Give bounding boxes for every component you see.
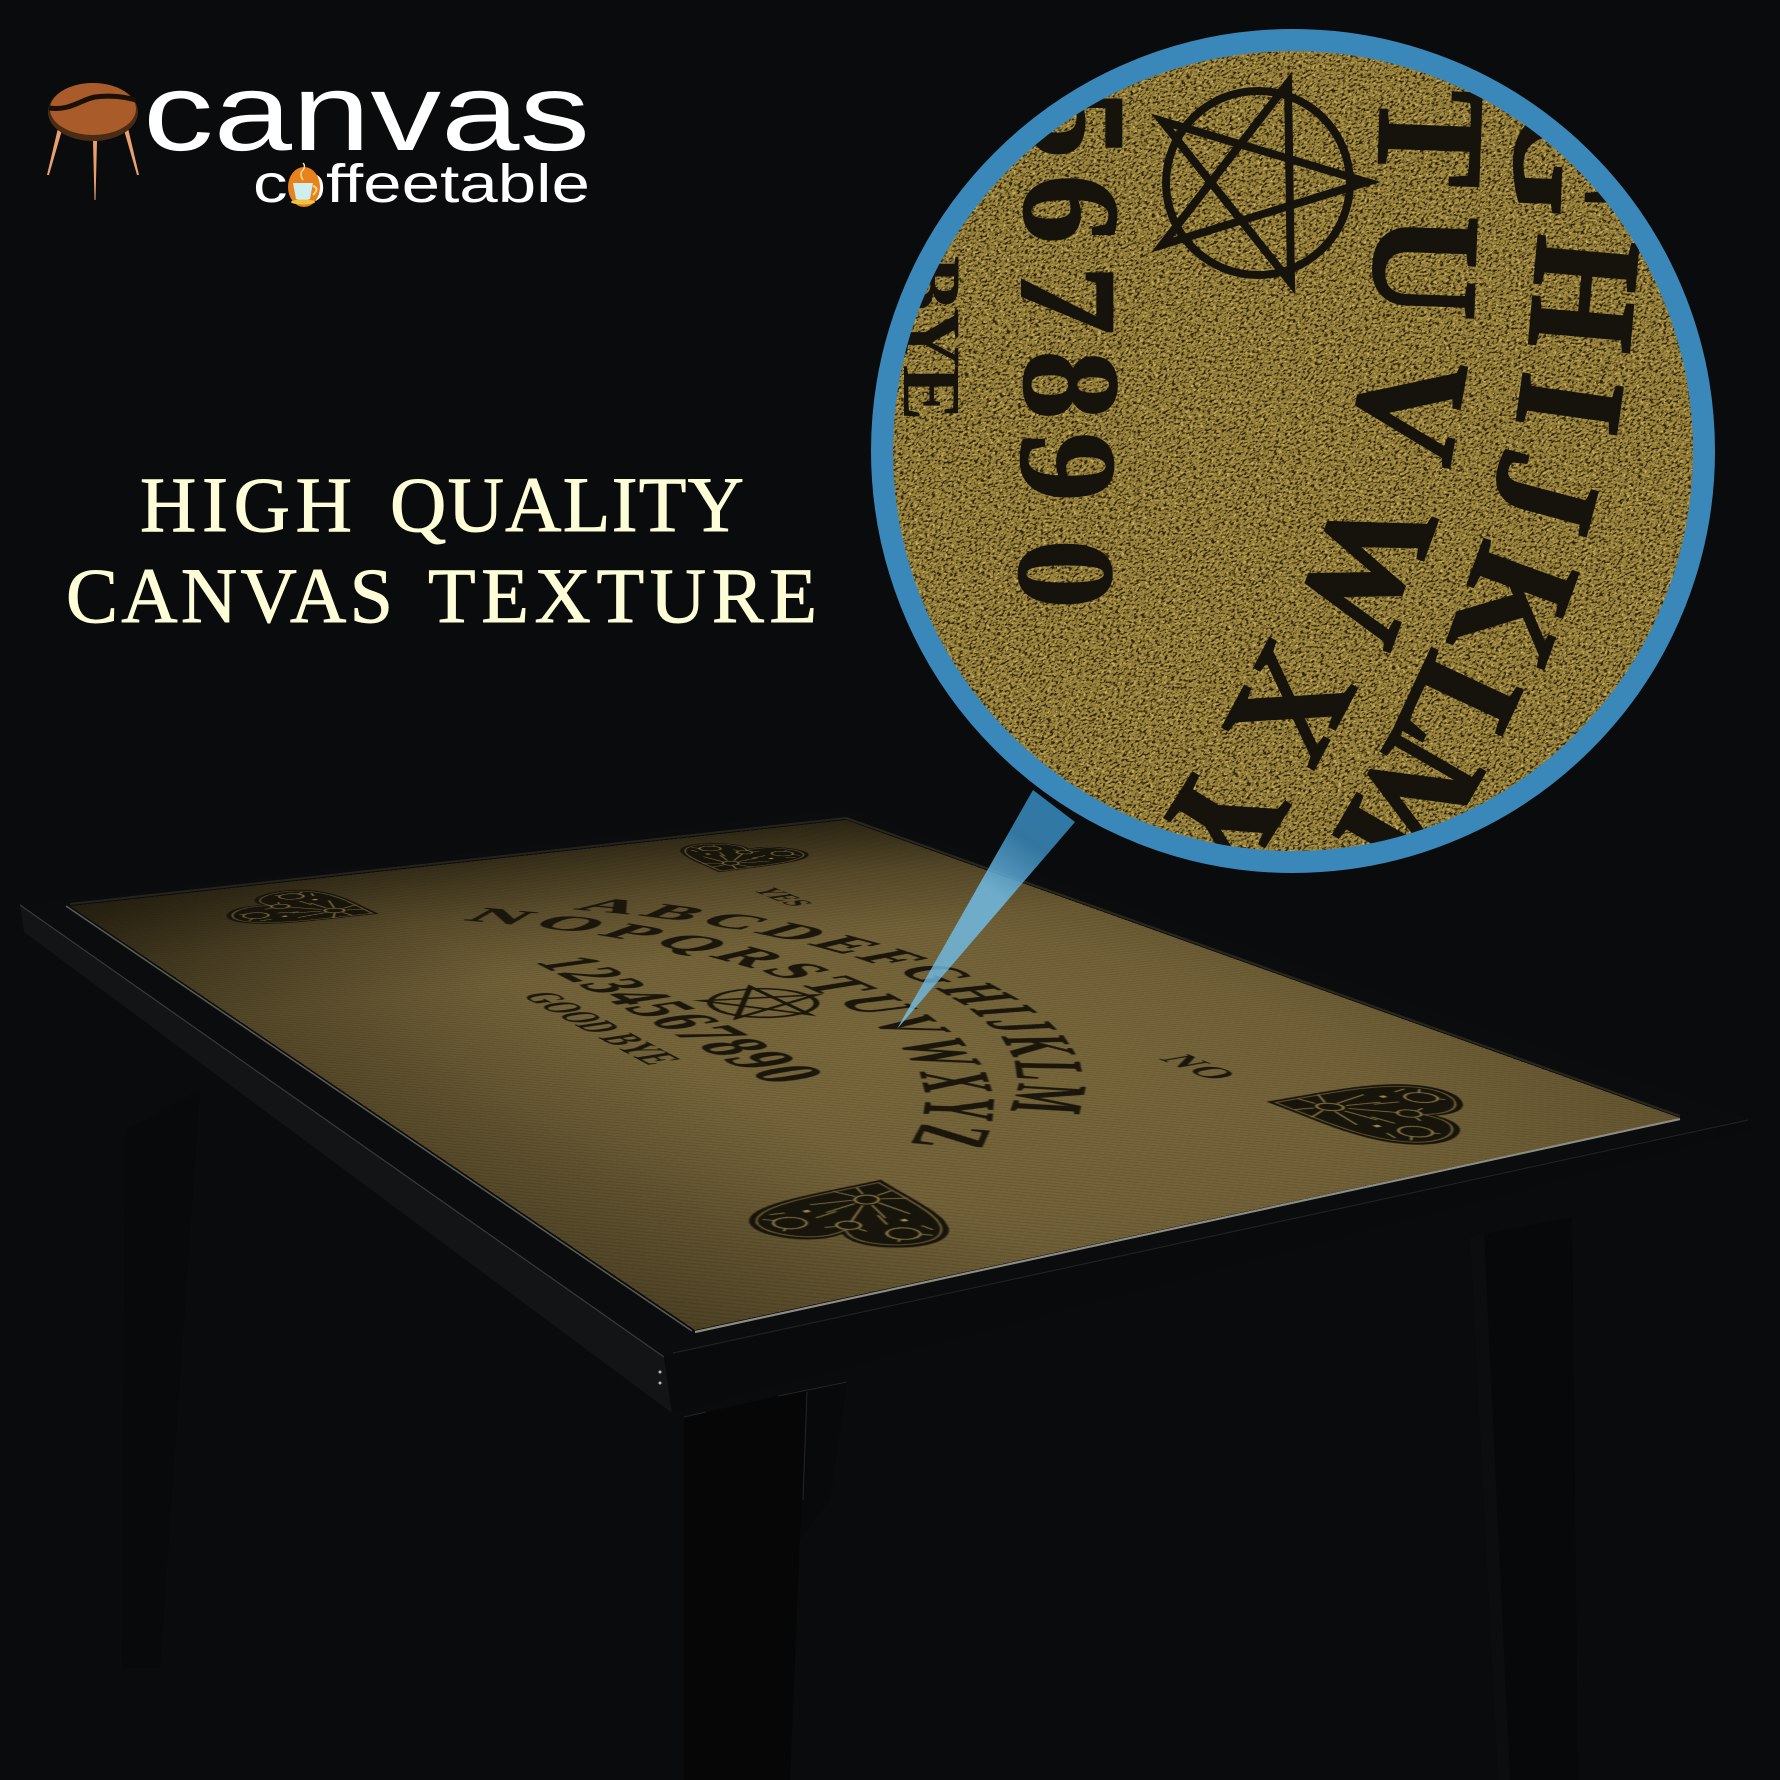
frame corner rivets xyxy=(658,1370,662,1384)
magnified pentagram xyxy=(1162,83,1367,283)
pentagram xyxy=(688,981,847,1024)
magnified good bye: E xyxy=(886,365,978,421)
magnified letters: M xyxy=(1302,703,1516,905)
icon: coffee cup xyxy=(288,163,320,207)
text: good bye: GOOD BYE xyxy=(509,990,693,1067)
frame side face: right xyxy=(664,1118,1750,1413)
heart: top left xyxy=(655,841,816,877)
table leg: left rear xyxy=(122,1090,200,1668)
heading line 1: QUALITY xyxy=(390,461,744,548)
magnified numbers: 9 xyxy=(992,432,1145,502)
magnified good bye: B xyxy=(886,255,978,311)
magnified numbers: 0 xyxy=(990,540,1143,608)
magnified numbers: 7 xyxy=(992,266,1145,334)
canvas weave texture xyxy=(70,820,1680,1330)
canvas fabric fill xyxy=(893,51,1693,851)
frame rim highlights xyxy=(20,818,1748,1357)
heading line 1: HIGH xyxy=(140,461,352,548)
alphabet arc: A to M: ABCDEFGHIJKLM xyxy=(572,899,1087,1114)
numbers row: 1234567890 xyxy=(516,953,847,1088)
panel: ouija board canvas top in perspective xyxy=(70,820,1680,1330)
table leg: right xyxy=(1470,1217,1578,1780)
logo: canvas coffeetable xyxy=(47,51,590,214)
magnified letters: V xyxy=(1317,343,1501,475)
blue ring xyxy=(882,40,1704,862)
magnified letters: L xyxy=(1362,632,1555,790)
magnified letters: K xyxy=(1415,526,1611,689)
table leg: front xyxy=(684,1382,847,1780)
magnified letters: X xyxy=(1192,621,1390,792)
magnified numbers: 5 xyxy=(1001,90,1154,158)
heart: top right xyxy=(1256,1074,1465,1149)
magnified letters: Y xyxy=(1123,732,1321,910)
heart: bottom left xyxy=(213,888,406,931)
magnified numbers: 8 xyxy=(995,350,1148,420)
magnified good bye: Y xyxy=(886,308,978,368)
magnified letters: H xyxy=(1496,231,1673,357)
text: coffeetable: coffeetable xyxy=(253,154,590,214)
heading line 2: TEXTURE xyxy=(428,552,817,639)
icon: coffee bean table xyxy=(47,83,139,200)
magnified letters: J xyxy=(1456,435,1637,549)
heading line 1 xyxy=(140,461,744,548)
magnified numbers: 6 xyxy=(995,174,1148,244)
magnified letters xyxy=(1123,87,1673,910)
overlay: logo, heading, zoom callout xyxy=(47,29,1715,1029)
magnified letters: G xyxy=(1480,101,1652,219)
magnified numbers xyxy=(1018,98,1122,604)
magnified letters: U xyxy=(1339,212,1511,322)
heading line 2 xyxy=(66,552,817,639)
magnified letters: T xyxy=(1345,87,1516,189)
magnified letters: W xyxy=(1264,472,1471,666)
zoom circle: magnified canvas texture xyxy=(871,29,1715,873)
text: yes: YES xyxy=(743,886,824,908)
magnified letters: I xyxy=(1483,365,1657,444)
text: no: NO xyxy=(1148,1052,1251,1083)
callout beam from board to zoom circle xyxy=(897,790,1075,1029)
alphabet arc: N to Z: NOPQRSTUVWXYZ xyxy=(463,908,996,1148)
frame side face: left xyxy=(20,905,672,1413)
frame top xyxy=(20,808,1748,1357)
heading line 2: CANVAS xyxy=(66,552,393,639)
text: canvas: canvas xyxy=(143,51,590,174)
heart: bottom right xyxy=(737,1171,975,1252)
heading: high quality canvas texture xyxy=(66,461,817,639)
magnified good bye xyxy=(904,256,958,416)
